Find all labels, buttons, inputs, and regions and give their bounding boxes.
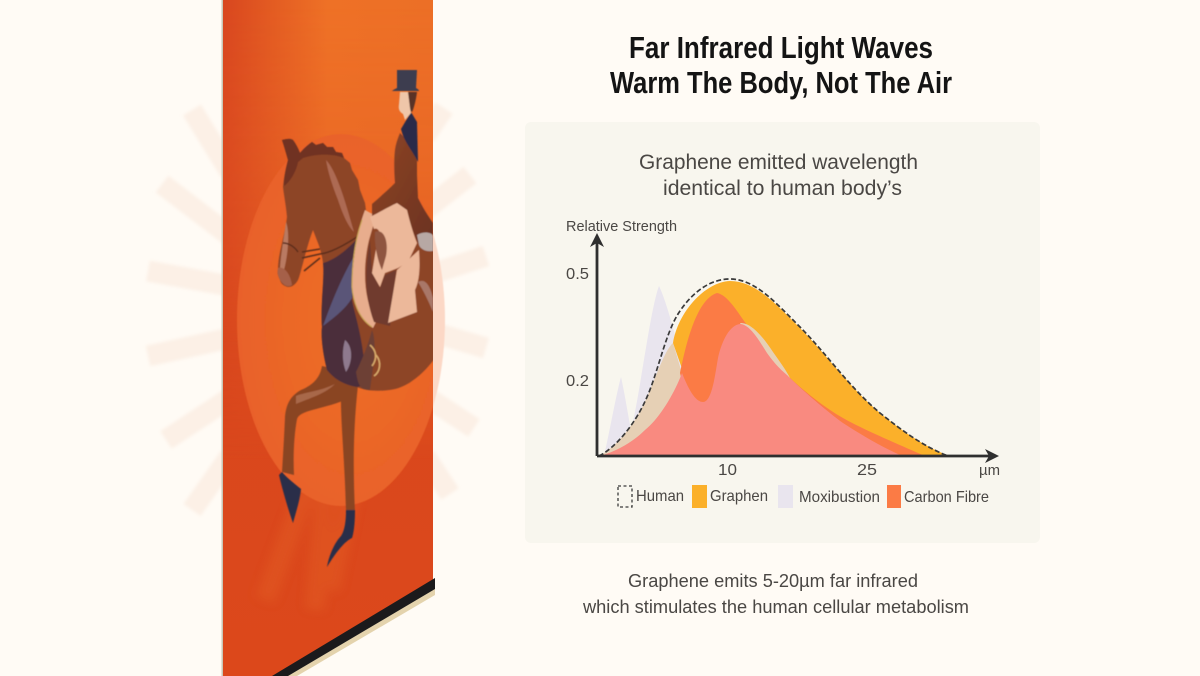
stirrup [370,345,380,376]
rider face [399,92,411,120]
banner left edge [222,0,223,676]
panel: chart card [525,122,1040,543]
panel heading: identical to human body’s [663,177,902,200]
x tick labels: µm [979,462,1000,479]
legend [618,485,989,508]
glow ellipse extending past the banner [237,134,445,506]
horse lifted foreleg [282,366,348,476]
saddle fold [375,231,387,270]
legend: moxibustion [778,485,880,508]
chart: emission spectra [566,218,1000,479]
banner base [222,0,433,676]
y tick labels: 0.2 [566,373,589,390]
horse ear and mane crest [282,139,344,186]
legend: graphen: Graphen [710,488,768,505]
rays on banner [264,493,346,605]
rider navy vest [401,112,418,162]
saddle blanket trim [352,220,372,327]
horse bridle [283,235,360,271]
y tick labels: 0.5 [566,266,589,283]
x tick labels: 25 [857,462,877,479]
carbon fibre area [680,293,925,456]
caption: which stimulates the human cellular metabolism [582,597,969,617]
saddle upper flap [370,203,417,287]
rider arm and jacket [372,133,433,243]
legend: graphen [692,485,768,508]
caption [582,571,969,617]
horse body and head [278,139,440,391]
title: Far Infrared Light Waves [629,30,933,65]
horse standing leg [341,385,358,512]
rider hand [417,232,433,251]
x tick labels: 10 [718,462,737,479]
legend: human: Human [636,488,684,505]
legend: human [618,486,684,507]
moxibustion area [604,286,690,456]
foreleg highlight [296,384,335,404]
saddle shadow [366,240,396,326]
cream underside [280,587,435,676]
horse lifted hoof [279,472,301,523]
horse and rider illustration [278,70,440,567]
y tick labels [566,266,589,390]
heat rays behind the banner [148,108,486,510]
graphene area [673,281,950,456]
horse belly sheen [343,340,351,372]
human tan area [599,343,690,456]
x tick labels [718,462,1000,479]
legend: carbon fibre: Carbon Fibre [904,489,989,506]
title: Warm The Body, Not The Air [610,65,952,100]
human dashed curve [599,279,948,456]
horse blue sheen [323,258,353,326]
saddle blanket underlay [352,210,376,328]
horse flank shading [356,330,375,390]
horse neck highlight [326,160,354,232]
legend: moxibustion: Moxibustion [799,489,880,506]
caption: Graphene emits 5-20µm far infrared [628,571,918,591]
tan sliver [740,323,790,378]
horse standing hoof [327,510,355,567]
axes [590,233,999,463]
legend: carbon fibre [887,485,989,508]
rider top hat [392,70,419,91]
panel heading [639,151,918,200]
horse dark chest [322,233,366,387]
central glow ellipse on banner [237,134,445,506]
banner bottom bar [272,578,435,676]
title [610,30,952,100]
horse barrel highlight [418,281,433,312]
horse face highlight [280,222,288,273]
pink overlap area [600,324,902,456]
saddle lower flap [388,250,420,323]
rider hair [408,91,418,112]
y axis label: Relative Strength [566,218,677,235]
black bar [272,578,435,676]
wall banner with horse and rider [222,0,445,676]
banner upper tone [223,0,433,223]
panel heading: Graphene emitted wavelength [639,151,918,174]
horse muzzle [278,268,292,286]
